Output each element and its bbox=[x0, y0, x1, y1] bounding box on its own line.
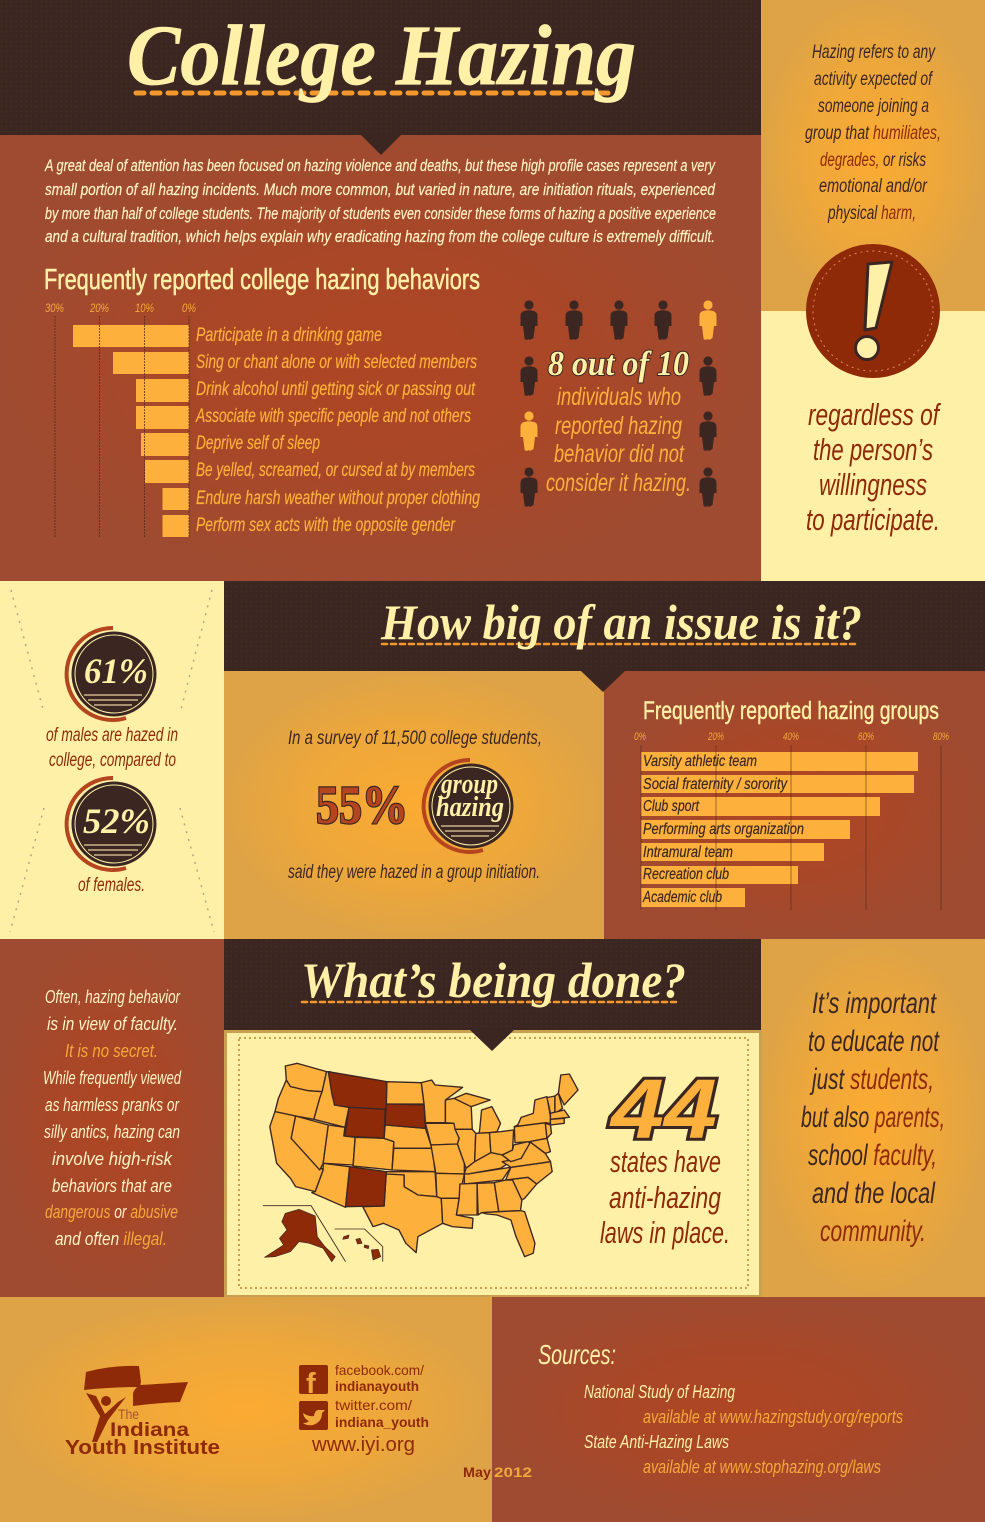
text: social handles: twitter.com/ bbox=[335, 1397, 412, 1413]
intro paragraph: small portion of all hazing incidents. Much more common, but varied in nature, are initiation rituals, experienced bbox=[45, 180, 715, 199]
bar chart: hazing groups: Social fraternity / sorority bbox=[643, 776, 788, 793]
stat: 44 states: anti-hazing bbox=[609, 1180, 721, 1215]
panel: gender stats bbox=[0, 581, 224, 939]
text: education message: and the local bbox=[812, 1177, 936, 1210]
panel: definition background bbox=[761, 0, 985, 581]
panel: faculty awareness: and often illegal. bbox=[55, 1228, 167, 1249]
badge: 52 percent bbox=[67, 778, 156, 870]
panel: hazing groups bbox=[604, 671, 985, 939]
icons: 10 people, 8 dark and 2 gold bbox=[520, 300, 716, 507]
definition conclusion text: willingness bbox=[819, 467, 927, 502]
panel: faculty awareness: silly antics, hazing can bbox=[44, 1121, 180, 1142]
panel: faculty awareness: is in view of faculty. bbox=[47, 1013, 178, 1034]
definition text: degrades, or risks bbox=[820, 150, 926, 171]
text: females: of females. bbox=[78, 875, 145, 896]
bar chart: hazing groups: Recreation club bbox=[643, 866, 729, 883]
badge: group hazing bbox=[424, 760, 514, 852]
panel: faculty awareness: Often, hazing behavior bbox=[45, 986, 181, 1007]
bar chart: hazing groups: Intramural team bbox=[643, 844, 733, 861]
text: social handles: facebook.com/ bbox=[335, 1362, 424, 1378]
sources: National Study of Hazing bbox=[584, 1382, 735, 1402]
badge: 61 percent: 61% bbox=[84, 651, 148, 691]
definition text bbox=[805, 42, 941, 224]
map: United States anti-hazing laws bbox=[263, 1063, 578, 1262]
definition text: physical harm, bbox=[827, 203, 916, 224]
definition conclusion text: regardless of bbox=[808, 397, 941, 432]
bar chart: hazing behaviors: Deprive self of sleep bbox=[196, 433, 320, 454]
logo: Indiana Youth Institute: Youth Institute bbox=[65, 1437, 220, 1459]
stat: 44 states: laws in place. bbox=[600, 1215, 730, 1250]
intro paragraph: by more than half of college students. The majority of students even consider these forms of hazing a positive experience bbox=[45, 204, 716, 223]
panel: intro background bbox=[0, 135, 761, 581]
definition text: Hazing refers to any bbox=[812, 42, 936, 63]
panel: faculty awareness: dangerous or abusive bbox=[45, 1201, 178, 1222]
sources: available at www.stophazing.org/laws bbox=[643, 1457, 881, 1477]
panel: faculty awareness: behaviors that are bbox=[52, 1175, 172, 1196]
bar chart: hazing groups: 60% bbox=[858, 731, 874, 743]
panel: what's being done header bbox=[224, 939, 761, 1051]
bar chart: hazing behaviors: 20% bbox=[89, 301, 109, 315]
map inset: Alaska and Hawaii bbox=[265, 1209, 381, 1262]
sources: Sources: bbox=[538, 1339, 616, 1370]
text: education message bbox=[801, 987, 945, 1248]
bar chart: hazing groups: Varsity athletic team bbox=[643, 753, 757, 770]
sources: State Anti-Hazing Laws bbox=[584, 1432, 729, 1452]
bar chart: hazing behaviors: Drink alcohol until getting sick or passing out bbox=[196, 379, 476, 400]
title: College Hazing bbox=[127, 7, 636, 103]
bar chart: hazing groups bbox=[634, 731, 949, 910]
stat: 8 out of 10: consider it hazing. bbox=[546, 469, 691, 497]
bar chart: hazing behaviors: 30% bbox=[45, 301, 64, 315]
definition text: emotional and/or bbox=[819, 176, 928, 197]
text: social handles: indianayouth bbox=[335, 1378, 419, 1394]
icon: exclamation badge bbox=[806, 244, 940, 378]
badge: 52 percent: 52% bbox=[83, 801, 150, 841]
stat: 55 percent: 55% bbox=[316, 775, 408, 835]
text: education message: community. bbox=[820, 1215, 926, 1248]
badge: 61 percent bbox=[67, 628, 156, 720]
panel: faculty awareness: as harmless pranks or bbox=[45, 1094, 180, 1115]
stat: 44 states bbox=[600, 1062, 730, 1250]
definition conclusion text: the person’s bbox=[813, 432, 933, 467]
sources: available at www.hazingstudy.org/reports bbox=[643, 1407, 903, 1427]
text: social handles bbox=[311, 1362, 429, 1456]
panel: footer organization bbox=[0, 1297, 492, 1522]
panel: faculty awareness: It is no secret. bbox=[65, 1040, 158, 1061]
date: May 2012: May bbox=[463, 1464, 491, 1480]
panel: education bbox=[761, 939, 985, 1297]
icon: facebook: f bbox=[306, 1368, 316, 1400]
panel: faculty awareness: involve high-risk bbox=[52, 1148, 174, 1169]
panel: faculty awareness: While frequently viewed bbox=[43, 1067, 181, 1088]
bar chart: hazing behaviors: Perform sex acts with the opposite gender bbox=[196, 515, 455, 536]
text: education message: school faculty, bbox=[808, 1139, 937, 1172]
panel: title header bbox=[0, 0, 761, 155]
bar chart: hazing groups: Performing arts organization bbox=[643, 821, 804, 838]
bar chart: hazing behaviors: Participate in a drinking game bbox=[196, 325, 382, 346]
bar chart: hazing groups: 80% bbox=[933, 731, 949, 743]
stat: 8 out of 10 bbox=[546, 344, 691, 497]
date: May 2012 bbox=[463, 1464, 532, 1480]
stat: 8 out of 10: individuals who bbox=[557, 383, 681, 411]
text: males hazed bbox=[46, 725, 178, 771]
panel: survey bbox=[224, 671, 604, 939]
intro paragraph: and a cultural tradition, which helps explain why eradicating hazing from the college culture is extremely difficult. bbox=[45, 227, 715, 246]
intro paragraph: A great deal of attention has been focused on hazing violence and deaths, but these high profile cases represent a very bbox=[44, 156, 716, 175]
text: survey conclusion: said they were hazed in a group initiation. bbox=[288, 862, 540, 883]
bar chart: hazing groups: 20% bbox=[707, 731, 724, 743]
badge: group hazing: group bbox=[440, 768, 498, 800]
panel: footer sources bbox=[492, 1297, 985, 1522]
bar chart: hazing behaviors bbox=[45, 301, 480, 537]
text: education message: but also parents, bbox=[801, 1101, 945, 1134]
bar chart: hazing behaviors: 0% bbox=[182, 301, 196, 315]
bar chart: hazing behaviors: Be yelled, screamed, or cursed at by members bbox=[196, 460, 475, 481]
bar chart: hazing groups: 40% bbox=[783, 731, 799, 743]
heading: how big of an issue: How big of an issue is it? bbox=[380, 594, 862, 650]
panel: map card bbox=[226, 1032, 760, 1296]
panel: issue header bbox=[224, 581, 985, 692]
stat: 8 out of 10: reported hazing bbox=[555, 412, 682, 440]
bar chart: hazing behaviors: 10% bbox=[135, 301, 154, 315]
bar chart: hazing groups: Club sport bbox=[643, 798, 699, 815]
bar chart: hazing groups: Academic club bbox=[642, 889, 722, 906]
intro paragraph bbox=[44, 156, 716, 246]
stat: 8 out of 10: behavior did not bbox=[554, 440, 685, 468]
stat: 44 states: 44 bbox=[609, 1062, 717, 1156]
sources bbox=[538, 1339, 903, 1477]
text: education message: just students, bbox=[809, 1063, 934, 1096]
text: survey intro: In a survey of 11,500 college students, bbox=[288, 728, 542, 749]
definition text: someone joining a bbox=[818, 96, 929, 117]
text: males hazed: college, compared to bbox=[49, 750, 176, 771]
bar chart: hazing behaviors: Associate with specific people and not others bbox=[195, 406, 471, 427]
heading: what's being done: What’s being done? bbox=[301, 952, 686, 1008]
icon: twitter bbox=[299, 1401, 328, 1430]
social links bbox=[299, 1362, 429, 1456]
panel: faculty awareness bbox=[0, 939, 224, 1297]
text: education message: It’s important bbox=[812, 987, 937, 1020]
text: social handles: www.iyi.org bbox=[311, 1434, 415, 1456]
heading: hazing behaviors: Frequently reported college hazing behaviors bbox=[44, 264, 480, 296]
text: social handles: indiana_youth bbox=[335, 1414, 429, 1430]
date: May 2012: 2012 bbox=[494, 1464, 532, 1480]
bar chart: hazing behaviors: Endure harsh weather without proper clothing bbox=[196, 488, 480, 509]
badge: group hazing: hazing bbox=[436, 791, 504, 823]
definition text: activity expected of bbox=[814, 69, 933, 90]
logo: Indiana Youth Institute: The bbox=[118, 1406, 139, 1422]
logo: Indiana Youth Institute: Indiana bbox=[110, 1420, 190, 1441]
stat: 8 out of 10: 8 out of 10 bbox=[548, 344, 689, 383]
logo: Indiana Youth Institute bbox=[65, 1366, 220, 1459]
text: males hazed: of males are hazed in bbox=[46, 725, 178, 746]
definition text: group that humiliates, bbox=[805, 123, 941, 144]
definition conclusion text bbox=[806, 397, 941, 537]
bar chart: hazing groups: 0% bbox=[634, 731, 646, 743]
bar chart: hazing behaviors: Sing or chant alone or with selected members bbox=[196, 352, 477, 373]
stat: 44 states: states have bbox=[610, 1144, 721, 1179]
